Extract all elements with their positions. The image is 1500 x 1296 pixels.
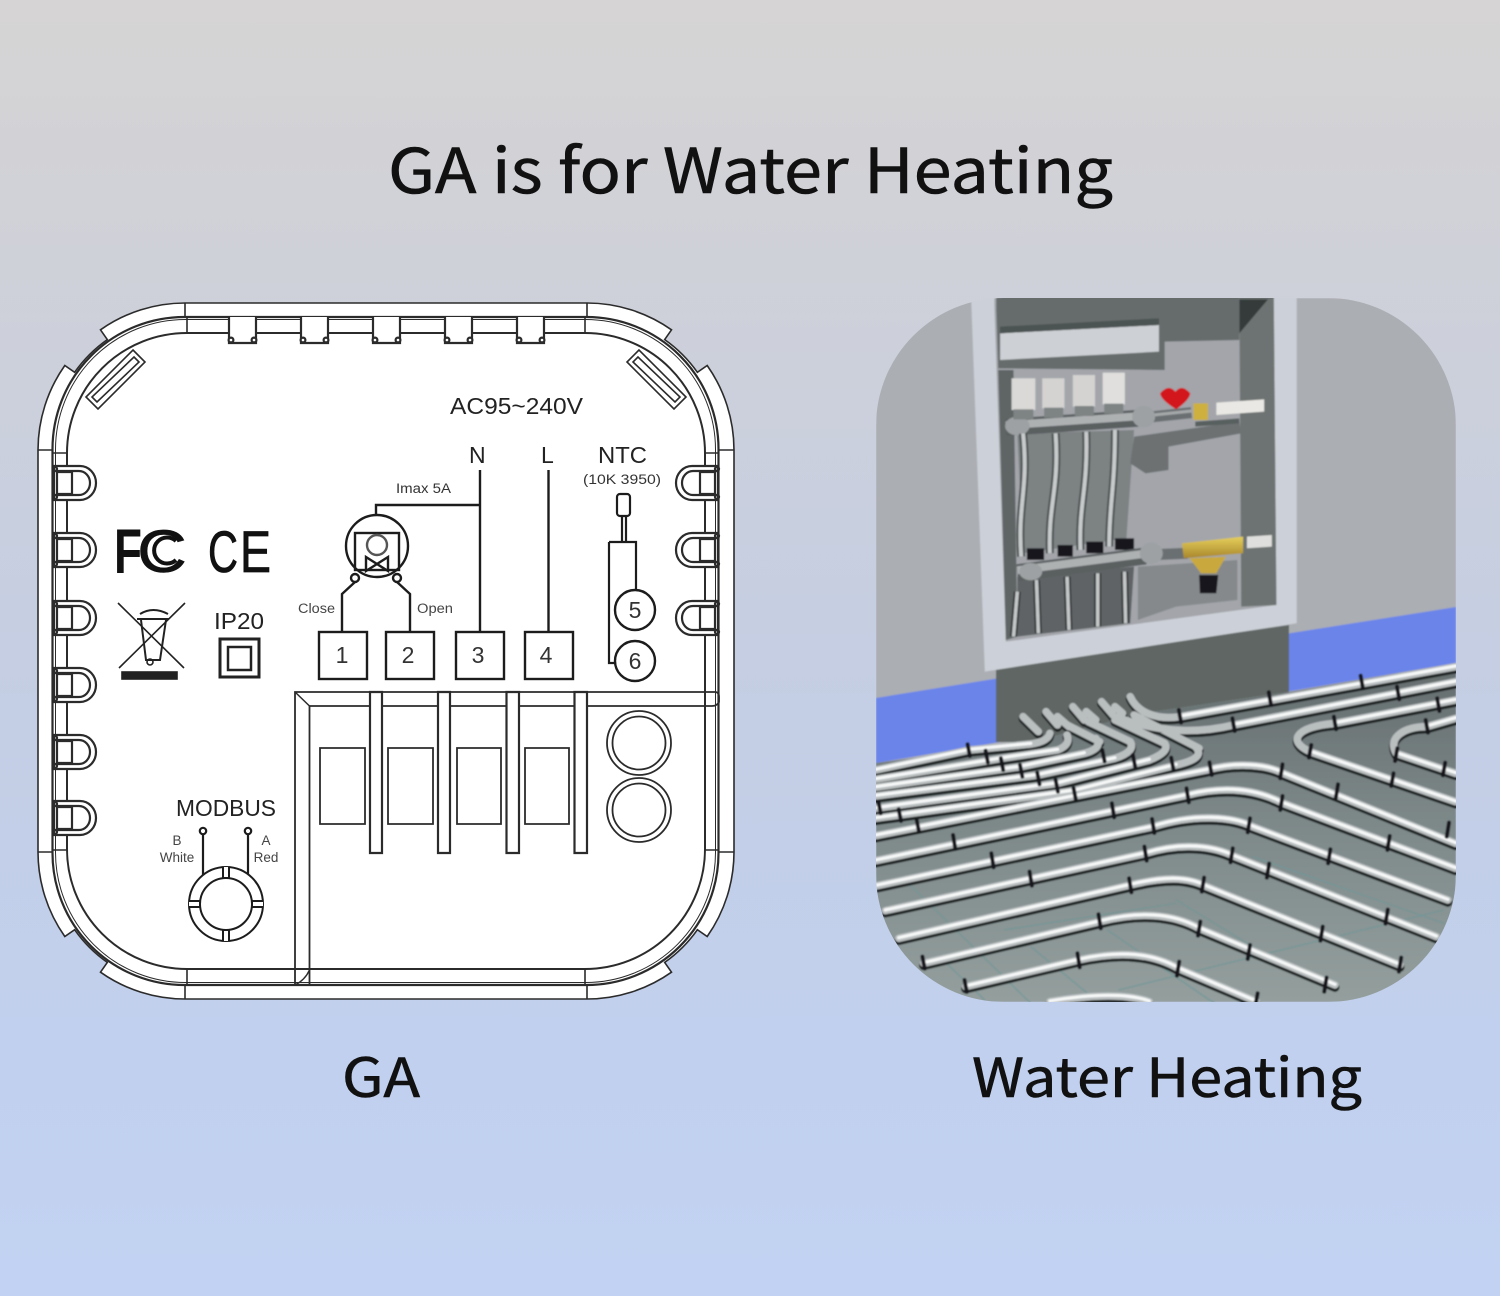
red ball valve handle [1160,388,1190,409]
terminal 1 [319,632,367,679]
valve ends [1005,417,1030,435]
terminal 5: 5 [629,597,641,623]
valve collars [1014,404,1123,419]
icon: IP20 rating: IP20 [214,608,264,634]
panel: water heating photo [876,290,1456,1005]
device casing [38,303,734,999]
floor [876,663,1456,1002]
manifold cabinet [971,290,1297,672]
pipe bodies [876,667,1456,1002]
NTC value label: (10K 3950) [583,472,661,487]
top manifold bar [1006,418,1138,427]
terminal 2: 2 [402,642,414,668]
wiring lines [342,470,548,632]
caption: Water Heating: Water Heating [972,1034,1362,1113]
MODBUS A label: Red [254,850,278,865]
NTC sensor wiring [609,494,636,663]
blue skirting left [876,678,1000,763]
MODBUS A label: A [261,833,271,848]
wall [876,298,1456,778]
icon: FCC mark [114,517,187,587]
lower manifold bar [1017,556,1146,573]
icon: FCC mark: F [114,517,142,587]
icon: FCC mark: C [137,518,187,585]
MODBUS connector [189,828,263,941]
top snap clips [229,317,544,343]
left snap clips [53,466,96,835]
MODBUS B label [160,833,194,865]
brass fitting and white inlet pipe [1193,403,1208,420]
brass regulator [1182,537,1243,558]
MODBUS B label: B [172,833,182,848]
icon: WEEE crossed-out bin [118,603,185,679]
lower tails [1014,572,1126,637]
lower black blocks [1027,538,1134,560]
MODBUS label: MODBUS [176,795,276,821]
icon: IP20 rating [214,608,264,677]
pipe shadows [876,669,1456,1004]
blue skirting right [1285,607,1456,692]
Close label: Close [298,601,335,616]
icon: CE mark [208,520,271,585]
title: GA is for Water Heating [388,121,1113,211]
dark base under cabinet [996,625,1289,742]
terminal 4: 4 [540,642,553,668]
terminal 1: 1 [336,642,348,668]
terminal 3: 3 [472,642,484,668]
right snap clips [676,466,719,635]
floor heating pipes [876,666,1456,1005]
pipe highlights [876,666,1456,1001]
terminal 3 [456,632,504,679]
floor grid lines [910,857,1444,1002]
caption: GA: GA [342,1034,420,1113]
terminal 5 [615,590,655,630]
risers [1020,430,1115,557]
white valve caps [1012,378,1035,410]
panel: GA wiring diagram [38,303,734,999]
terminal 6: 6 [629,648,641,674]
icon: CE mark: E [240,520,271,585]
terminal 6 [615,641,655,681]
L label: L [541,442,554,468]
pipe clips [878,676,1449,1005]
icon: CE mark: C [208,520,238,585]
voltage label: AC95~240V [450,393,584,419]
terminal 4 [525,632,573,679]
icon: motorised valve [346,515,408,582]
NTC label: NTC [598,442,647,468]
MODBUS A label [254,833,278,865]
shadows behind manifold [1017,430,1134,553]
terminal cover block [295,692,719,985]
terminal 2 [386,632,434,679]
N label: N [469,442,486,468]
Imax label: Imax 5A [396,481,451,496]
MODBUS B label: White [160,850,194,865]
Open label: Open [417,601,453,616]
